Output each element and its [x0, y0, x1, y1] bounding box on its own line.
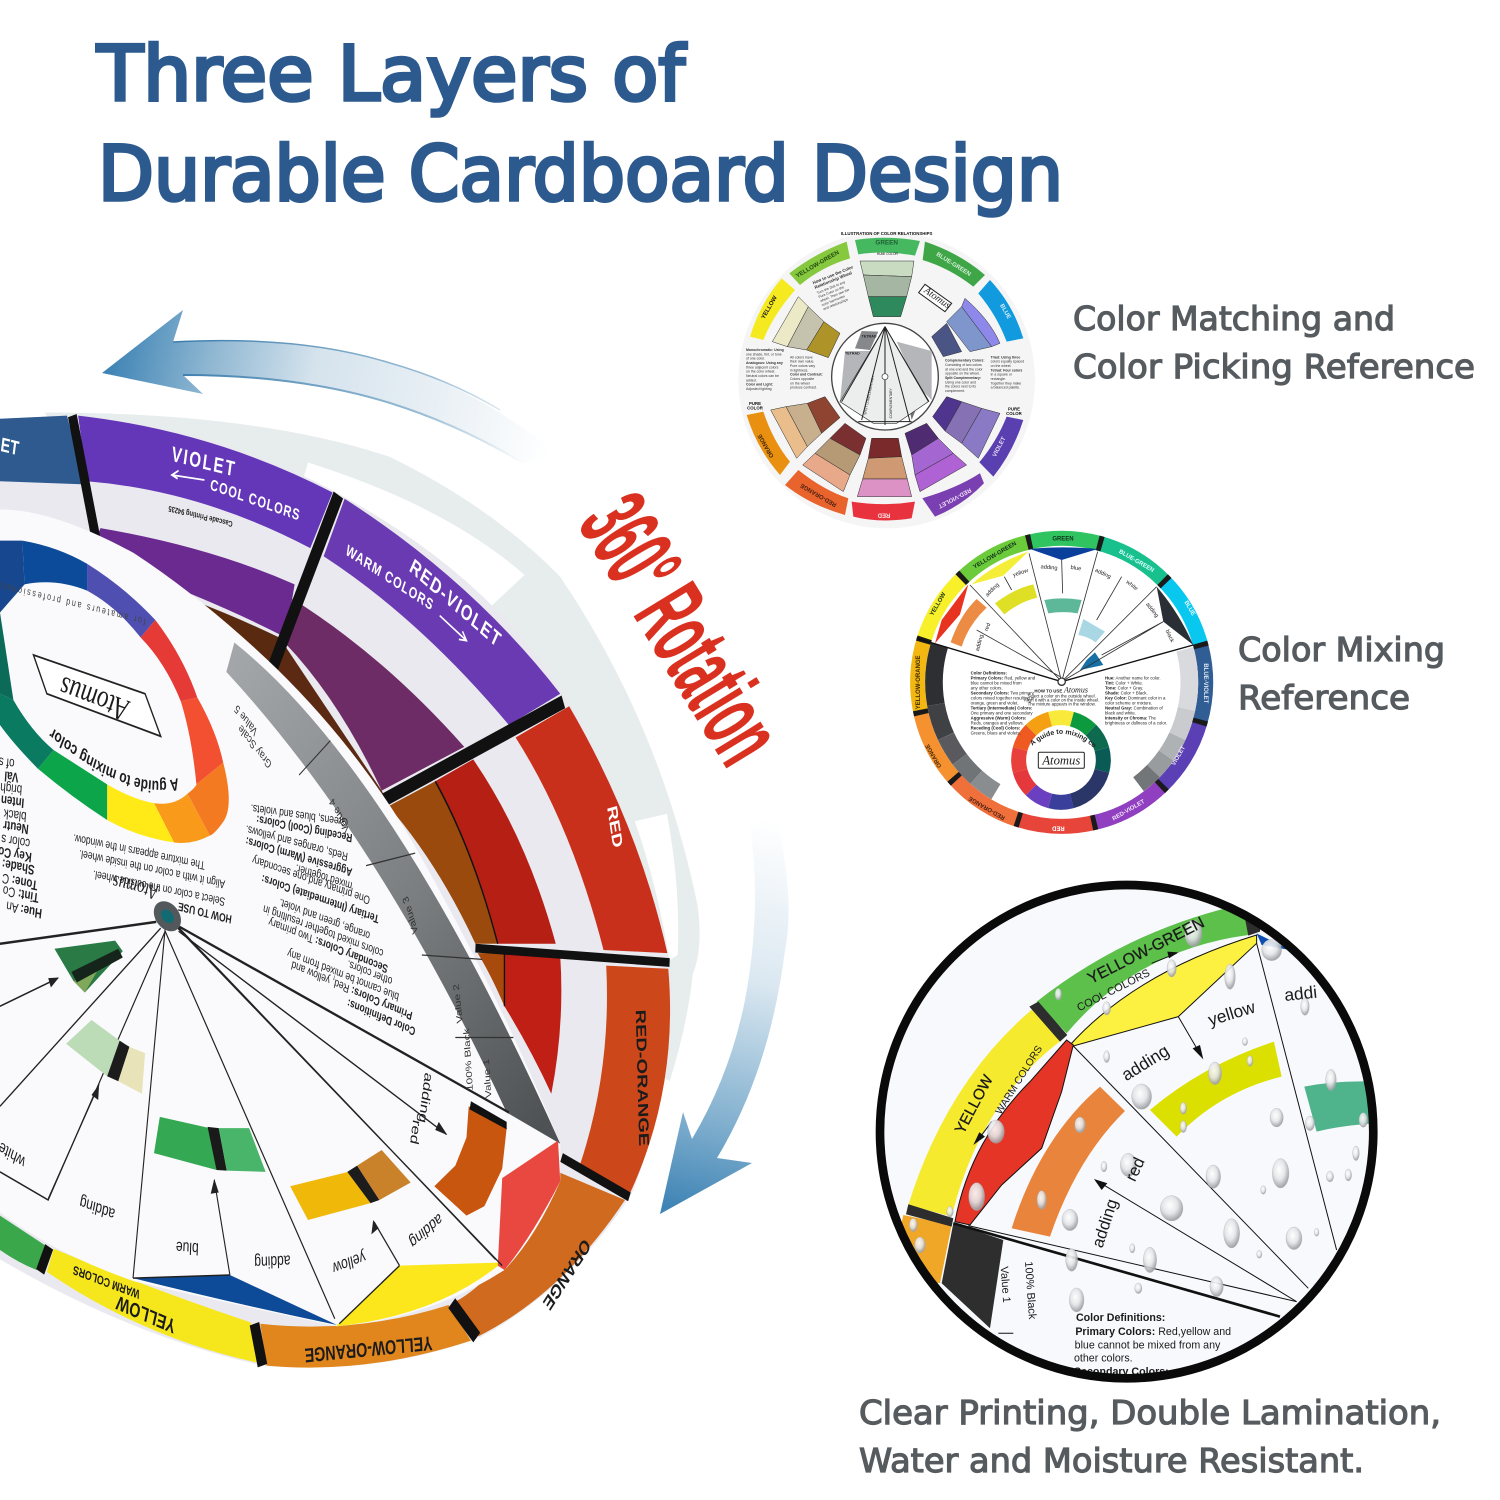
lens labels: blue cannot be mixed from any [1075, 1339, 1221, 1351]
small instructions text: Together they make [991, 381, 1021, 385]
wheel labels: BLUE [998, 303, 1012, 320]
title [96, 29, 1063, 218]
droplets [909, 920, 1368, 1312]
rim labels: YELLOW-ORANGE [916, 655, 922, 709]
gray value strip [226, 642, 560, 1144]
wedge lines [917, 552, 1193, 682]
glossary and definitions text: Reds, oranges and yellows. [971, 720, 1024, 725]
centre harmony dial: COMPLEMENTARY [889, 388, 893, 418]
small instructions text: Using one color and [945, 380, 976, 384]
wedge labels [0, 1071, 445, 1277]
lens labels: addi [1283, 982, 1318, 1005]
gray scale labels: Gray Scale [237, 721, 274, 770]
outer band labels: RED-ORANGE [632, 1009, 652, 1147]
small instructions text: produce contrast. [790, 386, 817, 390]
small instructions text: a balanced palette. [991, 386, 1020, 390]
cropped glossary text: Val [4, 768, 19, 786]
small instructions text: on the wheel. [991, 364, 1011, 368]
wheel labels: HUMI COLOR [877, 252, 899, 256]
colour definitions text: Secondary Colors: Two primary [267, 914, 389, 974]
arrow: top rotation swoosh [102, 310, 557, 463]
lens labels: COOL COLORS [1075, 967, 1152, 1014]
glossary and definitions text: Aggressive (Warm) Colors: [971, 715, 1027, 720]
small instructions text: at one end and the color [945, 367, 983, 371]
wedge labels: adding [407, 1209, 445, 1251]
rim labels: RED [1051, 825, 1065, 831]
window labels: red [984, 622, 992, 632]
wheel labels: ORANGE [757, 433, 776, 458]
glossary and definitions text: Tertiary (Intermediate) Colors: [971, 705, 1033, 710]
lens labels: Secondary Colors: [1074, 1366, 1169, 1378]
wedge labels: red [407, 1118, 423, 1146]
glossary and definitions text: Color Definitions: [971, 670, 1008, 675]
wedge labels: adding [78, 1192, 117, 1223]
colour rim [858, 479, 1265, 886]
wheel labels: YELLOW [761, 295, 779, 320]
window labels: black [1164, 629, 1175, 644]
cropped glossary text: Tone: C [1, 870, 38, 894]
glossary and definitions text: Select a color on the outside wheel. [1027, 693, 1096, 698]
window labels: adding [975, 634, 985, 652]
disc branding: A guide to mixing color [49, 729, 178, 793]
cropped glossary text: Hue: An [5, 898, 43, 922]
glossary and definitions text: Align it with a color on the inside wheel. [1024, 697, 1099, 702]
centre harmony dial: SPLIT COMPLEMENTARY [863, 374, 875, 415]
rim labels: ORANGE [925, 743, 943, 768]
colour definitions text: Primary Colors: Red, yellow and [290, 957, 414, 1021]
outer band labels: VIOLET [170, 442, 238, 481]
rim labels [916, 536, 1208, 831]
glossary and definitions text: brightness or dullness of a color. [1105, 721, 1167, 726]
rim labels: YELLOW-GREEN [973, 541, 1018, 571]
rim labels: BLUE [1182, 600, 1196, 617]
small instructions text: three adjacent colors [746, 365, 779, 369]
swatches [1012, 1042, 1377, 1237]
window labels: blue [1070, 565, 1082, 572]
glossary and definitions text: HOW TO USE [1034, 688, 1062, 693]
outer band labels: Cascade Printing 94235 [168, 504, 233, 527]
cropped glossary text: Neutr [2, 817, 29, 838]
cropped glossary text: Tint: Co [2, 882, 40, 906]
small instructions text: Color and Contrast: [790, 373, 823, 377]
middle layer colour windows [89, 528, 561, 1094]
colour definitions text: Tertiary (Intermediate) Colors: [261, 871, 380, 925]
small instructions text: in lightness. [790, 368, 808, 372]
glossary and definitions text: black and white. [1105, 711, 1136, 716]
outer band labels [0, 433, 652, 1367]
wheel labels: VIOLET [992, 436, 1008, 458]
gray scale labels: Value 1 [482, 1058, 494, 1099]
guide logo: A guide to mixing color [1030, 729, 1096, 748]
cropped glossary text: brigh [0, 780, 23, 798]
glossary and definitions text: blue cannot be mixed from [971, 680, 1022, 685]
wheel labels: RED [877, 512, 890, 518]
wheel labels: PURE [749, 401, 761, 406]
wheel labels: YELLOW-GREEN [795, 250, 840, 280]
rim dividers [858, 479, 1265, 886]
arrow: lower rotation swoosh [660, 819, 789, 1214]
small instructions text: on the color wheel. [746, 370, 775, 374]
wedge labels: yellow [331, 1247, 367, 1277]
small instructions text: rectangle. [991, 377, 1006, 381]
glossary and definitions text: Key Color: Dominant color in a [1105, 696, 1166, 701]
centre harmony dial [832, 323, 938, 430]
lens labels: adding [1088, 1197, 1122, 1250]
colour definitions text: colors mixed together resulting in [262, 902, 385, 959]
hub rivet [150, 895, 184, 937]
lens labels: yellow [1206, 997, 1258, 1030]
small instructions text: Pure colors vary [790, 364, 815, 368]
centre harmony dial: TETRAD [845, 351, 860, 355]
top mixing disc [0, 510, 560, 1326]
colour definitions text: One primary and one secondary [251, 852, 371, 906]
outer band labels: COOL COLORS [209, 476, 302, 524]
wheel labels: RED-VIOLET [937, 486, 972, 509]
glossary and definitions text [971, 670, 1167, 735]
outer band labels: WARM COLORS [344, 542, 436, 614]
cropped glossary text: Inten [0, 792, 25, 811]
small instructions text: Monochromatic: Using [746, 348, 784, 352]
small instructions text: colors equally spaced [991, 360, 1024, 364]
small instructions text: opposite on the wheel. [945, 372, 980, 376]
how to use text [73, 831, 233, 925]
glossary and definitions text: Receding (Cool) Colors: [971, 725, 1021, 730]
small instructions text: Triad: Using three [991, 355, 1020, 359]
glossary and definitions text: Greens, blues and violets. [971, 730, 1021, 735]
wheel labels: GREEN [875, 239, 898, 246]
wheel: colour mixing [910, 530, 1270, 926]
wheel labels [747, 231, 1023, 518]
glossary and definitions text: Tint: Color + White. [1105, 681, 1143, 686]
small instructions text: All colors have [790, 355, 813, 359]
small instructions text: Neutral colors can be [746, 374, 779, 378]
caption: colour matching: Color Matching and [1073, 299, 1395, 338]
how to use text: The mixture appears in the window. [73, 831, 206, 871]
rim labels: BLUE-GREEN [1118, 549, 1155, 574]
lens labels: YELLOW [952, 1072, 997, 1137]
colour definitions text: Greens, blues and violets. [250, 801, 348, 828]
wedge labels: blue [176, 1237, 199, 1257]
tint, tone and shade wedges [771, 261, 1000, 497]
glossary and definitions text: One primary and one secondary [971, 710, 1033, 715]
outer band labels: RED [604, 804, 626, 850]
gray scale labels: Value 5 [233, 702, 260, 737]
lens frame [880, 885, 1373, 1378]
cropped glossary text: black [3, 806, 27, 825]
centre harmony dial: TETRAD [862, 335, 877, 339]
colour definitions text [245, 801, 417, 1037]
detail lens: water resistant closeup [880, 885, 1377, 1378]
caption: lamination [859, 1393, 1441, 1480]
lens labels: adding [1118, 1040, 1172, 1085]
window labels: white [1124, 579, 1139, 592]
cropped glossary text: color s [1, 831, 31, 852]
window labels: adding [984, 582, 1001, 598]
small instructions text: Complementary Colors: [945, 359, 984, 363]
glossary and definitions text: colors mixed together resulting in [971, 695, 1035, 700]
colour definitions text: Receding (Cool) Colors: [256, 812, 353, 843]
label: 360 degree rotation: 360° Rotation [558, 476, 805, 782]
rim labels: YELLOW [929, 592, 948, 617]
outer band labels: YELLOW-ORANGE [304, 1332, 433, 1367]
glossary and definitions text: Neutral Gray: Combination of [1105, 706, 1164, 711]
wedge labels: adding [254, 1251, 291, 1271]
outer band labels: WARM COLORS [72, 1262, 141, 1301]
caption: lamination: Water and Moisture Resistant. [859, 1441, 1364, 1480]
caption: colour matching: Color Picking Reference [1073, 347, 1475, 386]
lens labels: YELLOW-GREEN [1085, 914, 1207, 988]
rim labels: RED-VIOLET [1112, 799, 1146, 822]
rim colours [890, 903, 1290, 1328]
small instructions text: Adjusted lighting [746, 387, 772, 391]
outer band labels: ORANGE [540, 1234, 594, 1315]
disc branding: Atomus [57, 668, 133, 729]
caption: colour matching [1073, 299, 1475, 386]
guide logo: Atomus [1041, 753, 1080, 767]
rim labels: RED-ORANGE [968, 795, 1006, 820]
colour definitions text: other colors. [346, 957, 394, 987]
lens labels [952, 914, 1318, 1378]
window labels: adding [1094, 568, 1112, 580]
small instructions text: and relationships [823, 298, 849, 311]
small instructions text: Color and Light: [746, 383, 773, 387]
gray scale arcs [881, 502, 1242, 863]
glossary and definitions text: color scheme or mixture. [1105, 701, 1152, 706]
Atomus logo: Atomus [921, 285, 953, 311]
small instructions text: Turn the Dial to any [816, 280, 846, 295]
small instructions text: Split Complementary: [945, 376, 981, 380]
wheel labels: ILLUSTRATION OF COLOR RELATIONSHIPS [841, 231, 932, 236]
window labels: yellow [1012, 568, 1030, 579]
small instructions text: in a square or [991, 373, 1013, 377]
caption: colour mixing: Color Mixing [1238, 630, 1445, 669]
how to use text: Select a color on the outside wheel. [92, 867, 226, 907]
colour definitions text: blue cannot be mixed from any [286, 945, 400, 1003]
small instructions text [746, 264, 1024, 393]
small instructions text: How to use the Color [812, 264, 854, 285]
small instructions text: Relationship Wheel [814, 270, 853, 290]
cropped glossary text [0, 754, 43, 922]
rim labels: GREEN [1052, 536, 1074, 542]
lens labels: 100% Black [1022, 1261, 1038, 1320]
wedge labels: adding [415, 1071, 435, 1124]
glossary and definitions text: orange, green and violet. [971, 700, 1019, 705]
colour definitions text: Aggressive (Warm) Colors: [245, 834, 353, 878]
small instructions text: Colors opposite [790, 377, 814, 381]
small instructions text: Pure Color on the [818, 285, 845, 299]
colour definitions text: Reds, oranges and yellows. [245, 822, 349, 862]
small instructions text: their own value. [790, 360, 814, 364]
how to use text: Align it with a color on the inside wheel. [78, 847, 226, 890]
outer wheel base [0, 416, 672, 1368]
small instructions text: Consisting of two colors [945, 363, 982, 367]
outer colour labels [747, 238, 1023, 520]
colour definitions text: orange, green and violet. [278, 895, 371, 941]
wheel labels: COLOR [1006, 411, 1023, 416]
small instructions text: complement. [945, 389, 965, 393]
title: Durable Cardboard Design [98, 129, 1063, 218]
title: Three Layers of [96, 29, 687, 118]
main exploded color wheel [0, 414, 670, 1368]
how to use text: Atomus [111, 871, 161, 905]
glossary and definitions text: Intensity or Chroma: The [1105, 716, 1156, 721]
caption: colour mixing [1238, 630, 1445, 717]
caption: colour mixing: Reference [1238, 678, 1410, 717]
window labels: adding [1040, 564, 1058, 572]
caption: lamination: Clear Printing, Double Lamination, [859, 1393, 1441, 1432]
small instructions text: of one color. [746, 357, 765, 361]
colour definitions text: mixed together. [295, 861, 353, 891]
lines and arrows [953, 943, 1337, 1333]
guide ring [1001, 700, 1121, 820]
glossary and definitions text: Tone: Color + Gray. [1105, 686, 1143, 691]
disc branding: for amateurs and professionals [0, 579, 146, 627]
lens labels: Color Definitions: [1076, 1312, 1165, 1324]
glossary and definitions text: Hue: Another name for color. [1105, 676, 1161, 681]
guide logo [1030, 729, 1096, 769]
gray scale labels: 100% Black [462, 1027, 475, 1091]
wheel labels: PURE [1008, 406, 1020, 411]
glossary and definitions text: The mixture appears in the window. [1028, 701, 1096, 706]
colour ring on disc [0, 541, 229, 843]
gray scale labels: Value 4 [328, 795, 352, 835]
glossary and definitions text: Secondary Colors: Two primary [971, 690, 1035, 695]
disc branding [0, 579, 178, 793]
coloured edge windows [133, 1275, 337, 1325]
wedge lines and arrows [0, 919, 509, 1324]
small instructions text: wheel. Then see the [819, 288, 850, 303]
small instructions text: added. [746, 378, 757, 382]
wheel: colour relationships [738, 231, 1035, 528]
glossary and definitions text: Atomus [1063, 686, 1088, 695]
upper window shapes [935, 547, 1193, 670]
small instructions text: the colors next to its [945, 385, 976, 389]
small instructions text: Tetrad: Four colors [991, 368, 1022, 372]
how to use text: HOW TO USE [177, 899, 233, 925]
outer colour band segments [0, 416, 670, 1368]
glossary and definitions text: any other colors. [971, 685, 1003, 690]
lens labels: Value 1 [998, 1266, 1012, 1303]
outer band labels: YELLOW [114, 1291, 177, 1338]
gray scale labels: Value 3 [401, 894, 420, 935]
lens labels: other colors. [1074, 1353, 1133, 1365]
glossary and definitions text: Shade: Color + Black. [1105, 691, 1148, 696]
transparent outer ring behind main wheel [45, 412, 700, 1081]
outer band labels: RED-VIOLET [407, 554, 505, 652]
colour definitions text: Color Definitions: [346, 996, 417, 1037]
glossary and definitions text: Primary Colors: Red, yellow and [971, 675, 1036, 680]
wheel labels: BLUE-GREEN [935, 252, 972, 278]
small instructions text: color harmonies [821, 294, 846, 307]
mixture windows [54, 941, 507, 1220]
rim labels: BLUE-VIOLET [1202, 663, 1208, 704]
window labels: adding [1144, 602, 1159, 619]
lens labels: red [1121, 1154, 1149, 1184]
cropped glossary text: Shade: [1, 856, 35, 878]
gray scale labels [233, 702, 494, 1099]
wheel labels: RED-ORANGE [800, 482, 838, 507]
outer band labels: ET [0, 433, 21, 460]
hub [1058, 678, 1065, 685]
lens labels: Primary Colors: Red,yellow and [1075, 1326, 1231, 1338]
window labels [975, 564, 1175, 652]
lens labels: WARM COLORS [994, 1044, 1045, 1117]
wheel labels: COLOR [747, 406, 764, 411]
rim labels: VIOLET [1171, 745, 1187, 767]
gray scale labels: Value 2 [452, 983, 465, 1024]
small instructions text: on the wheel [790, 381, 810, 385]
small instructions text: Analogous: Using any [746, 361, 783, 365]
black segment dividers [40, 416, 670, 1366]
small instructions text: one shade, tint, or tone [746, 352, 782, 356]
